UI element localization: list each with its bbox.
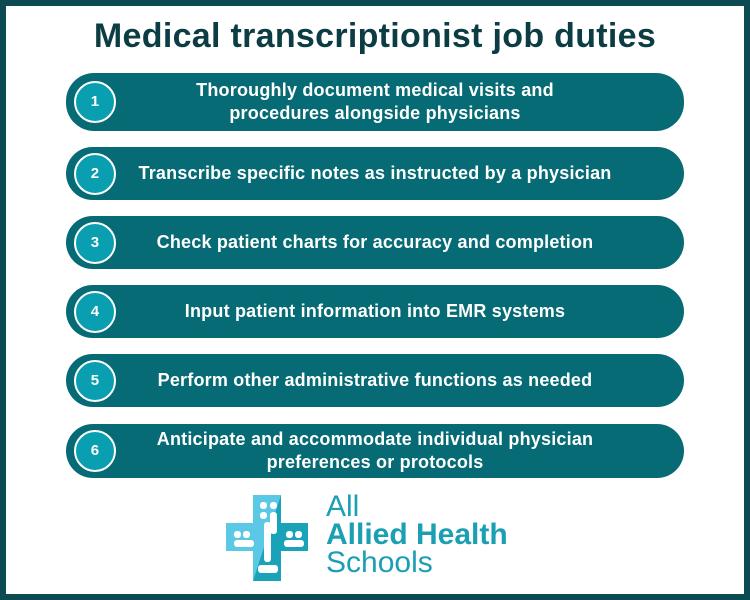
duty 4: 4 [91, 302, 99, 320]
duty 4: Input patient information into EMR systems [185, 301, 565, 321]
duty 2: 2 [91, 164, 99, 182]
duty 1: procedures alongside physicians [229, 103, 521, 123]
logo text: Allied Health [326, 518, 508, 551]
logo text: All [326, 490, 359, 523]
duty 5: 5 [91, 372, 99, 388]
duty 1: 1 [91, 93, 99, 110]
duty 2 [66, 147, 684, 200]
duty 2: Transcribe specific notes as instructed by a physician [138, 163, 611, 183]
logo [226, 490, 508, 581]
duty 3 [66, 216, 684, 269]
logo text: Schools [326, 546, 433, 579]
duty 6: Anticipate and accommodate individual physician [157, 429, 593, 449]
title: Medical transcriptionist job duties [94, 17, 656, 55]
duty 1 [66, 73, 684, 131]
icon: cross [226, 495, 308, 581]
duty 1: Thoroughly document medical visits and [196, 80, 554, 100]
duty 5: Perform other administrative functions as needed [158, 370, 592, 390]
logo text [326, 490, 508, 579]
duty 4 [66, 285, 684, 338]
duty 6 [66, 424, 684, 478]
duty 5 [66, 354, 684, 407]
duty 3: Check patient charts for accuracy and completion [157, 232, 593, 252]
duty 6: preferences or protocols [267, 452, 483, 472]
duty 3: 3 [91, 234, 99, 250]
duty 6: 6 [91, 442, 99, 459]
